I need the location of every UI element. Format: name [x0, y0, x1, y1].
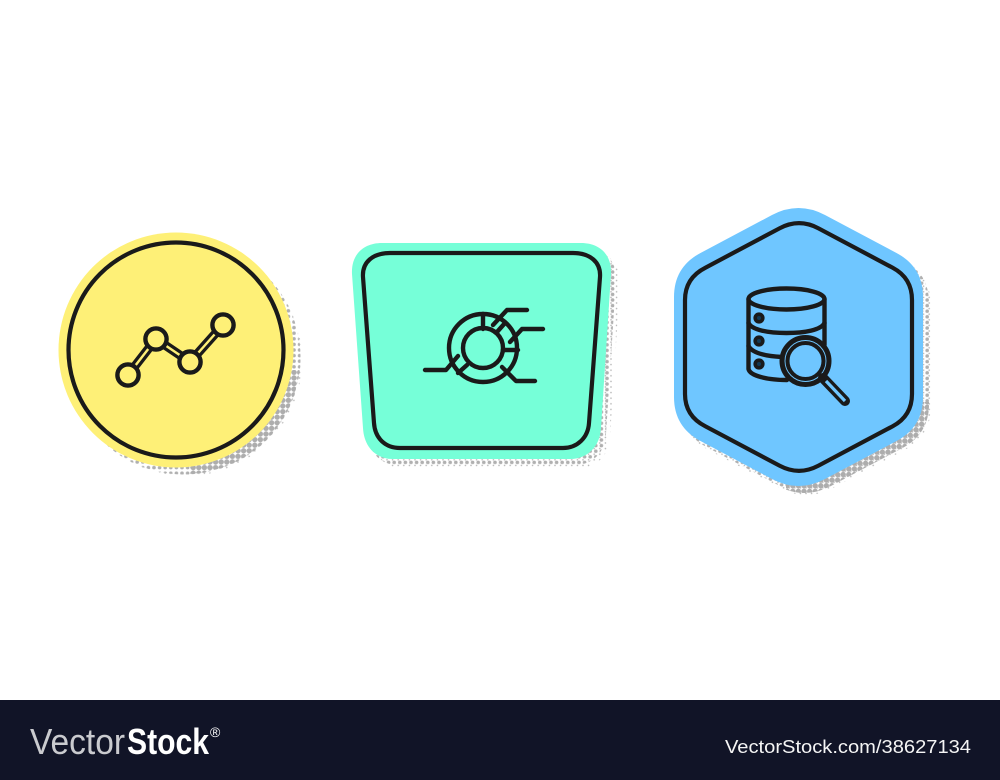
registered mark: ® [210, 724, 221, 740]
logo wordmark: Vector [30, 721, 125, 762]
icon: line chart [117, 314, 234, 386]
panel: teal trapezoid badge [352, 243, 620, 468]
halftone shadow: hexagon [690, 267, 930, 494]
teal trapezoid background [352, 243, 611, 459]
trapezoid outline [363, 253, 600, 448]
infographic canvas [0, 208, 1000, 780]
icon: database with magnifying glass [748, 288, 845, 401]
icon: donut chart with callouts [425, 310, 543, 382]
circle outline [68, 242, 284, 458]
halftone shadow: trapezoid [357, 249, 620, 468]
blue hexagon background [674, 208, 923, 486]
panel: yellow circle badge [58, 232, 302, 476]
logo wordmark bold: Stock [127, 721, 210, 762]
footer bar [0, 700, 1000, 780]
hexagon outline [685, 223, 912, 471]
yellow circle background [58, 232, 294, 468]
image id: VectorStock.com/38627134 [725, 737, 971, 757]
panel: blue hexagon badge [674, 208, 931, 495]
halftone shadow: circle [108, 281, 300, 474]
